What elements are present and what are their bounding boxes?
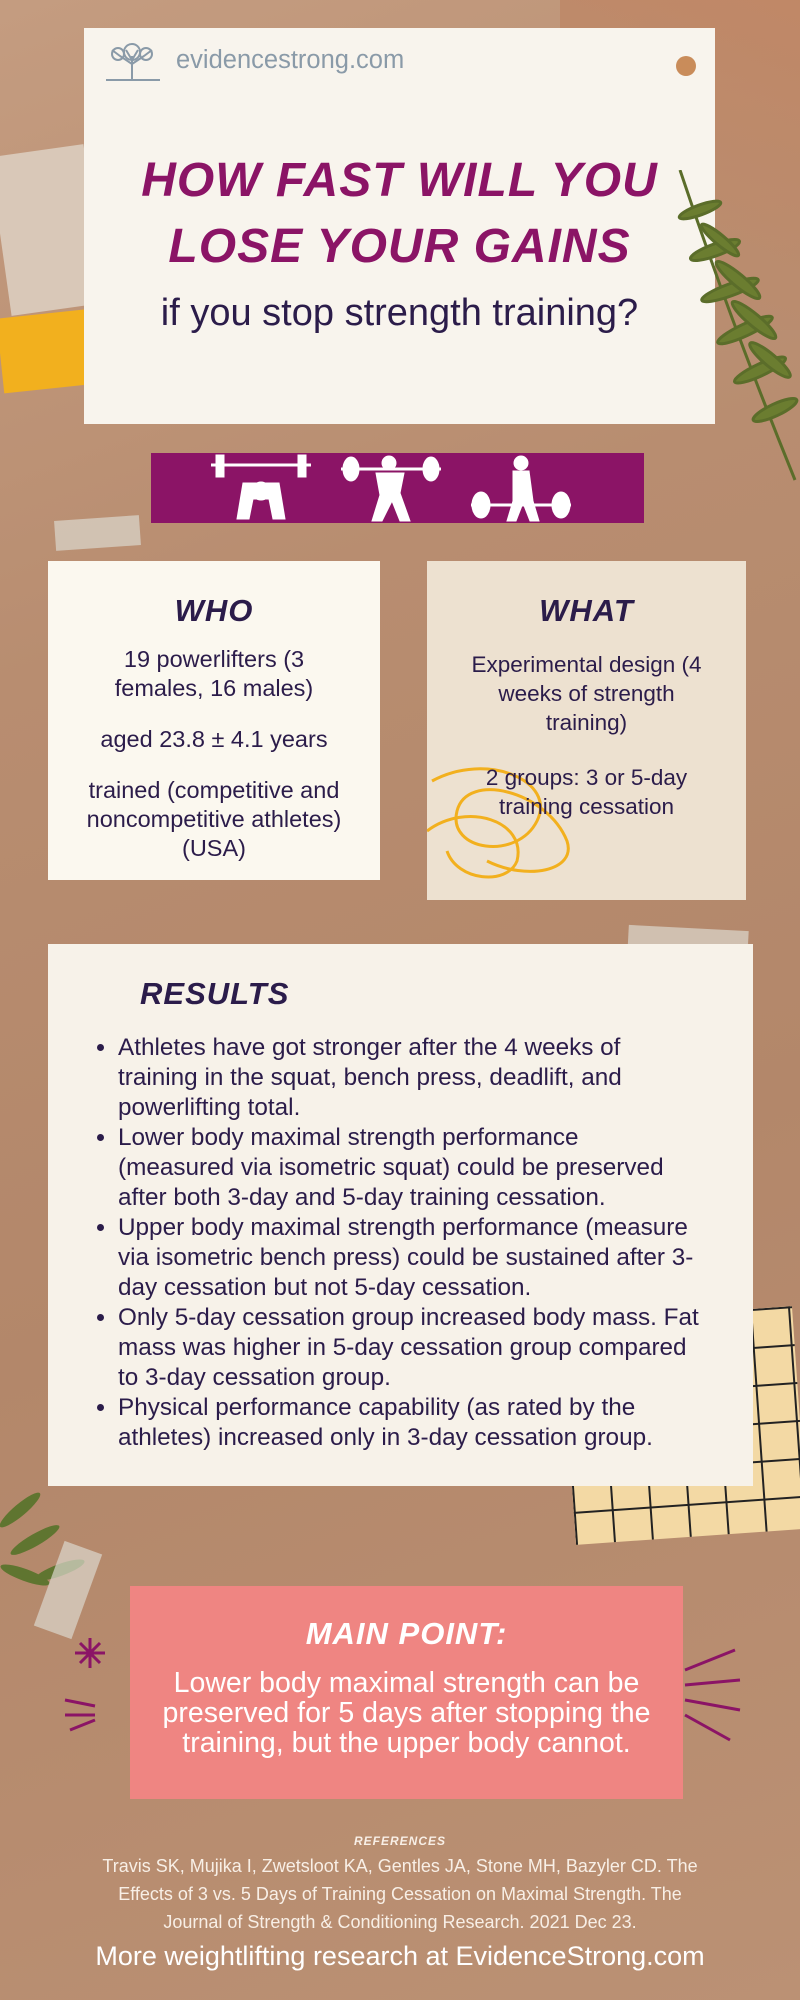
logo text: evidencestrong.com (176, 46, 404, 74)
title: HOW FAST WILL YOU (141, 154, 658, 207)
text: participants: trained (competitive and (89, 777, 339, 803)
text: citation (102, 1856, 698, 1932)
text: main point: Lower body maximal strength can be (174, 1667, 639, 1699)
text: participants: females, 16 males) (115, 675, 313, 701)
icon: squat (341, 456, 441, 521)
heading: RESULTS: RESULTS (140, 976, 289, 1011)
results list: Lower body maximal strength performance (118, 1124, 579, 1151)
title (141, 154, 658, 273)
results list: via isometric bench press) could be sustained after 3- (118, 1244, 693, 1271)
results list: day cessation but not 5-day cessation. (118, 1274, 531, 1301)
text: design: 2 groups: 3 or 5-day (486, 765, 687, 790)
tape (54, 515, 141, 551)
footer: More weightlifting research at EvidenceStrong.com (95, 1941, 705, 1971)
text: design (471, 652, 702, 819)
decoration: yellow scribble paper (0, 306, 129, 393)
text: participants (87, 646, 341, 861)
text: participants: noncompetitive athletes) (87, 806, 341, 832)
decoration: fern bottom left (0, 1492, 84, 1586)
panel: WHAT (427, 561, 746, 900)
panel: RESULTS (48, 944, 753, 1486)
icon: tree (106, 43, 160, 81)
results list: after both 3-day and 5-day training cessation. (118, 1184, 606, 1211)
text: main point (163, 1667, 650, 1759)
results list: powerlifting total. (118, 1094, 300, 1121)
text: participants: 19 powerlifters (3 (124, 646, 304, 672)
panel: main point (130, 1586, 683, 1799)
results list: to 3-day cessation group. (118, 1364, 391, 1391)
subtitle: if you stop strength training? (161, 292, 638, 334)
text: citation: Journal of Strength & Conditioning Research. 2021 Dec 23. (163, 1912, 637, 1932)
references (102, 1834, 698, 1932)
text: citation: Effects of 3 vs. 5 Days of Training Cessation on Maximal Strength. The (118, 1884, 682, 1904)
results list: mass was higher in 5-day cessation group compared (118, 1334, 687, 1361)
results list: athletes) increased only in 3-day cessation group. (118, 1424, 653, 1451)
decoration: bursts (64, 1638, 105, 1732)
decoration: stamp paper left (0, 144, 106, 316)
title: LOSE YOUR GAINS (168, 220, 631, 273)
panel: WHO (48, 561, 380, 880)
scribble (427, 767, 570, 878)
heading: WHAT: WHAT (539, 593, 634, 628)
heading: WHO: WHO (175, 593, 253, 628)
text: participants: (USA) (182, 835, 246, 861)
results list: Upper body maximal strength performance (measure (118, 1214, 688, 1241)
decoration: fern (678, 170, 798, 481)
heading: references: REFERENCES (354, 1834, 446, 1848)
results list: Only 5-day cessation group increased body mass. Fat (118, 1304, 699, 1331)
decoration: grid paper (561, 1306, 800, 1545)
icon: bench press (211, 455, 311, 519)
results list: (measured via isometric squat) could be preserved (118, 1154, 664, 1181)
pin (676, 56, 696, 76)
text: design: training cessation (499, 794, 674, 819)
text: design: weeks of strength (498, 681, 675, 706)
text: citation: Travis SK, Mujika I, Zwetsloot KA, Gentles JA, Stone MH, Bazyler CD. The (102, 1856, 698, 1876)
text: design: Experimental design (4 (471, 652, 702, 677)
results list: Physical performance capability (as rated by the (118, 1394, 635, 1421)
panel: title (84, 28, 715, 424)
icon: deadlift (471, 456, 571, 521)
results list: Athletes have got stronger after the 4 weeks of (118, 1034, 620, 1061)
text: design: training) (546, 710, 627, 735)
text: participants: aged 23.8 ± 4.1 years (100, 726, 328, 752)
results list: training in the squat, bench press, deadlift, and (118, 1064, 622, 1091)
heading: main point: MAIN POINT: (306, 1616, 507, 1651)
text: main point: preserved for 5 days after stopping the (163, 1697, 650, 1729)
text: main point: training, but the upper body cannot. (182, 1727, 631, 1759)
tape (627, 925, 749, 961)
results list (97, 1034, 699, 1451)
banner: lifters (151, 453, 644, 523)
logo (106, 43, 404, 81)
